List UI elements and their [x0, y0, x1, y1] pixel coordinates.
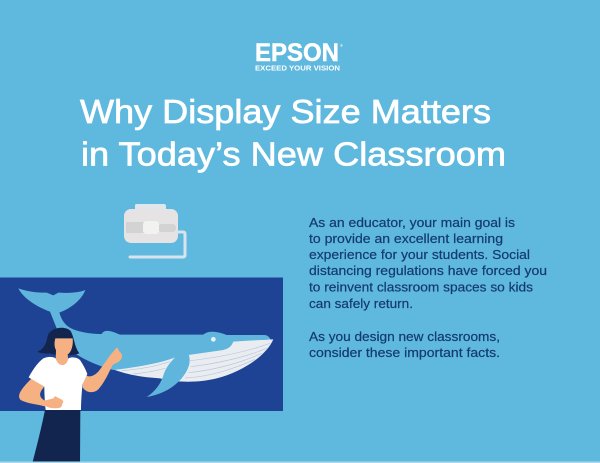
left arm	[19, 378, 63, 408]
belly stripes	[122, 343, 270, 378]
paragraph: As an educator, your main goal is	[309, 215, 515, 230]
whale illustration	[18, 288, 273, 397]
logo: Epson: EXCEED YOUR VISION	[255, 66, 340, 72]
title	[80, 93, 506, 172]
title: in Today’s New Classroom	[81, 136, 506, 172]
hand	[44, 396, 63, 408]
screen panel	[0, 278, 283, 411]
logo: Epson: ®	[340, 43, 343, 48]
neck and face	[55, 338, 73, 366]
whale body	[18, 288, 271, 370]
logo: Epson: EPSON	[255, 39, 339, 67]
title: Why Display Size Matters	[80, 93, 491, 130]
whale belly	[113, 339, 273, 382]
whale eye	[211, 337, 216, 342]
paragraph: distancing regulations have forced you	[309, 263, 547, 278]
paragraph: experience for your students. Social	[309, 247, 530, 262]
skirt	[32, 410, 80, 463]
paragraph: consider these important facts.	[309, 345, 500, 360]
bottom edge	[0, 462, 600, 463]
shirt	[29, 357, 87, 410]
paragraph	[309, 215, 547, 360]
forearm pointing	[83, 347, 122, 392]
teacher figure	[19, 328, 122, 463]
hair	[37, 328, 79, 355]
paragraph: to reinvent classroom spaces so kids	[309, 280, 533, 294]
whale flipper	[147, 353, 190, 397]
paragraph: to provide an excellent learning	[309, 231, 503, 246]
paragraph: can safely return.	[309, 296, 413, 311]
icon: projector	[124, 204, 185, 257]
paragraph: As you design new classrooms,	[309, 329, 500, 344]
